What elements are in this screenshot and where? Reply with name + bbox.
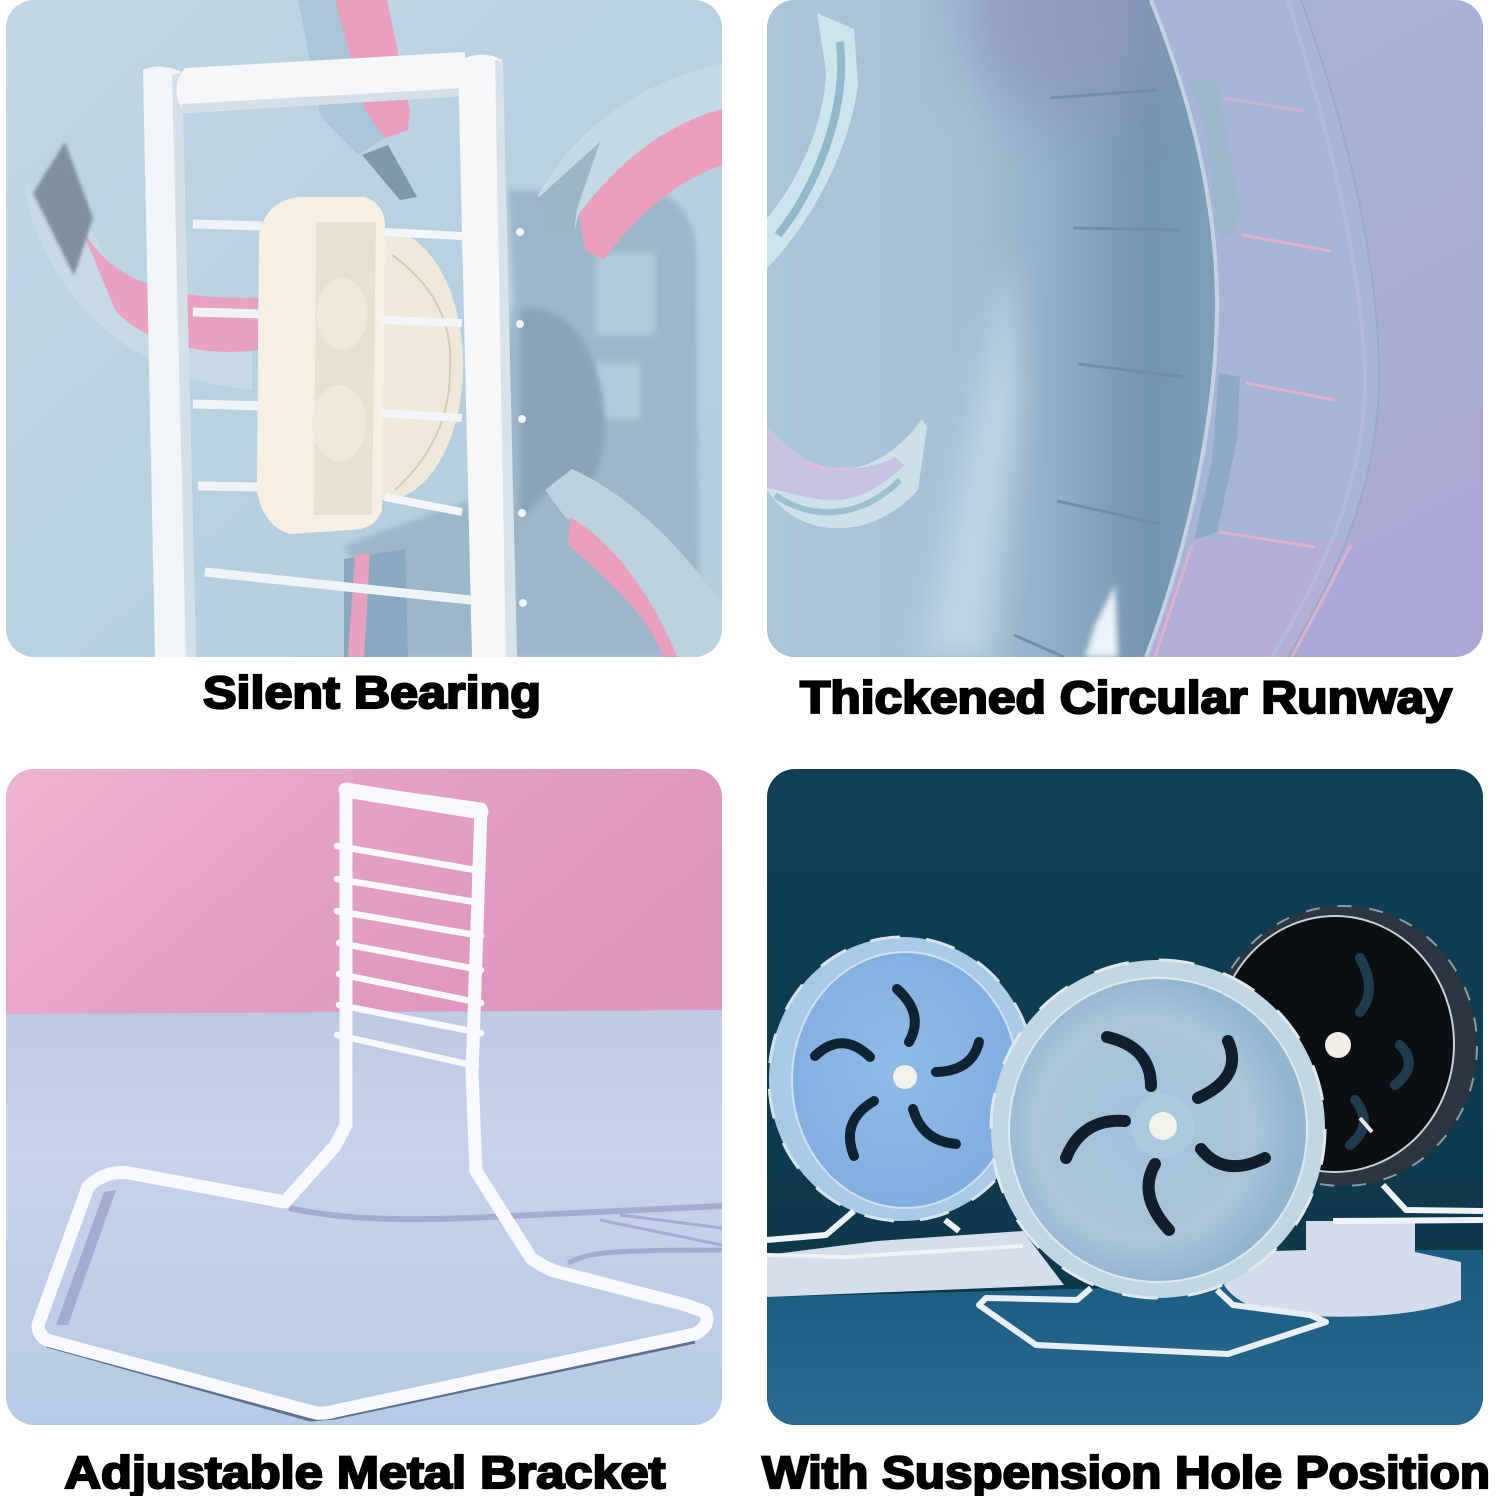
metal frame bbox=[143, 52, 517, 657]
wheel edge bbox=[1146, 0, 1217, 657]
icon: stand wire bbox=[767, 1185, 1483, 1240]
panel: three wheels photo bbox=[767, 769, 1483, 1425]
rungs in front bbox=[380, 232, 462, 512]
icon: bearing block bbox=[257, 197, 385, 534]
pink slot: right bbox=[538, 63, 722, 260]
tick marks bbox=[1014, 90, 1183, 657]
icon: black wheel bbox=[1209, 906, 1477, 1186]
pink slot: bottom bbox=[344, 549, 408, 657]
pink slot: top bbox=[298, 0, 417, 200]
heading: silent bearing: Silent Bearing bbox=[203, 667, 541, 718]
bearing disc bbox=[382, 230, 463, 500]
slot lower-left bbox=[767, 419, 927, 528]
wheel interior bbox=[767, 0, 1217, 657]
rivets bbox=[516, 228, 527, 607]
panel: thickened runway photo bbox=[767, 0, 1483, 657]
pink ridges bbox=[1219, 98, 1335, 547]
runway tabs bbox=[1189, 80, 1240, 540]
icon: blue wheel bbox=[769, 937, 1035, 1221]
pink slot: left bbox=[24, 142, 258, 390]
ladder rungs behind bbox=[193, 224, 480, 601]
icon: teal front wheel bbox=[991, 960, 1325, 1298]
floor bbox=[767, 1250, 1483, 1425]
slot top-left bbox=[767, 13, 858, 268]
panel: silent bearing photo bbox=[6, 0, 722, 657]
icon: front stand wire bbox=[979, 1288, 1326, 1354]
heading: thickened runway: Thickened Circular Runway bbox=[800, 672, 1452, 723]
runway rim bbox=[1146, 0, 1379, 657]
hub shadow bbox=[345, 190, 700, 657]
white base plates bbox=[767, 1221, 1461, 1317]
icon: white wire bracket bbox=[38, 790, 707, 1413]
panel: metal bracket photo bbox=[6, 769, 722, 1425]
pink slot: lower right bbox=[545, 469, 722, 657]
bracket shadow bbox=[47, 1190, 722, 1420]
